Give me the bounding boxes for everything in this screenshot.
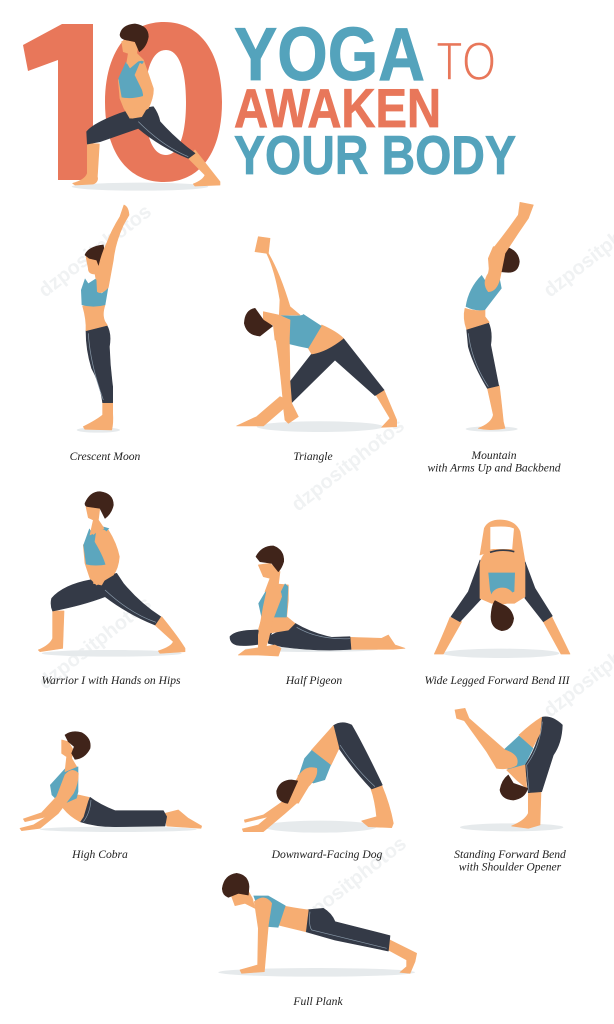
caption: Mountain with Arms Up and Backbend: Mountain: [471, 449, 517, 462]
caption: Standing Forward Bend with Shoulder Opener: with Shoulder Opener: [459, 860, 562, 874]
pose: triangle: [237, 237, 397, 432]
caption: Downward-Facing Dog: Downward-Facing Dog: [271, 848, 383, 861]
pose: wide legged forward bend III: [434, 520, 570, 658]
caption: Standing Forward Bend with Shoulder Opener: Standing Forward Bend: [454, 848, 566, 861]
caption: Triangle: Triangle: [293, 450, 333, 463]
pose: high cobra: [20, 732, 202, 832]
caption: Warrior I with Hands on Hips: Warrior I with Hands on Hips: [41, 674, 181, 687]
pose: standing forward bend with shoulder opener: [455, 708, 563, 831]
pose: half pigeon: [230, 546, 405, 656]
infographic canvas: dzpositphotos: [35, 200, 156, 302]
infographic canvas: dzpositphotos: [288, 414, 409, 516]
caption: Full Plank: Full Plank: [292, 995, 343, 1008]
title: AWAKEN: [234, 77, 441, 139]
infographic canvas: dzpositphotos: [35, 592, 156, 694]
caption: Mountain with Arms Up and Backbend: with Arms Up and Backbend: [427, 462, 561, 474]
title: TO: [436, 30, 496, 92]
caption: Crescent Moon: Crescent Moon: [70, 450, 141, 463]
pose: crescent moon: [77, 205, 129, 433]
pose: downward-facing dog: [242, 723, 393, 833]
title: YOGA: [234, 12, 425, 96]
title: YOUR BODY: [234, 124, 516, 186]
pose: mountain with arms up and backbend: [464, 202, 533, 432]
caption: High Cobra: High Cobra: [71, 848, 128, 861]
pose: full plank: [218, 873, 417, 977]
infographic canvas: dzpositphotos: [290, 832, 411, 934]
header figure: warrior pose: [72, 24, 220, 191]
big number 10: [23, 22, 222, 182]
caption: Half Pigeon: Half Pigeon: [285, 674, 342, 687]
caption: Wide Legged Forward Bend III: Wide Legged Forward Bend III: [424, 674, 571, 687]
title: [234, 12, 516, 186]
pose: warrior I with hands on hips: [38, 492, 185, 657]
